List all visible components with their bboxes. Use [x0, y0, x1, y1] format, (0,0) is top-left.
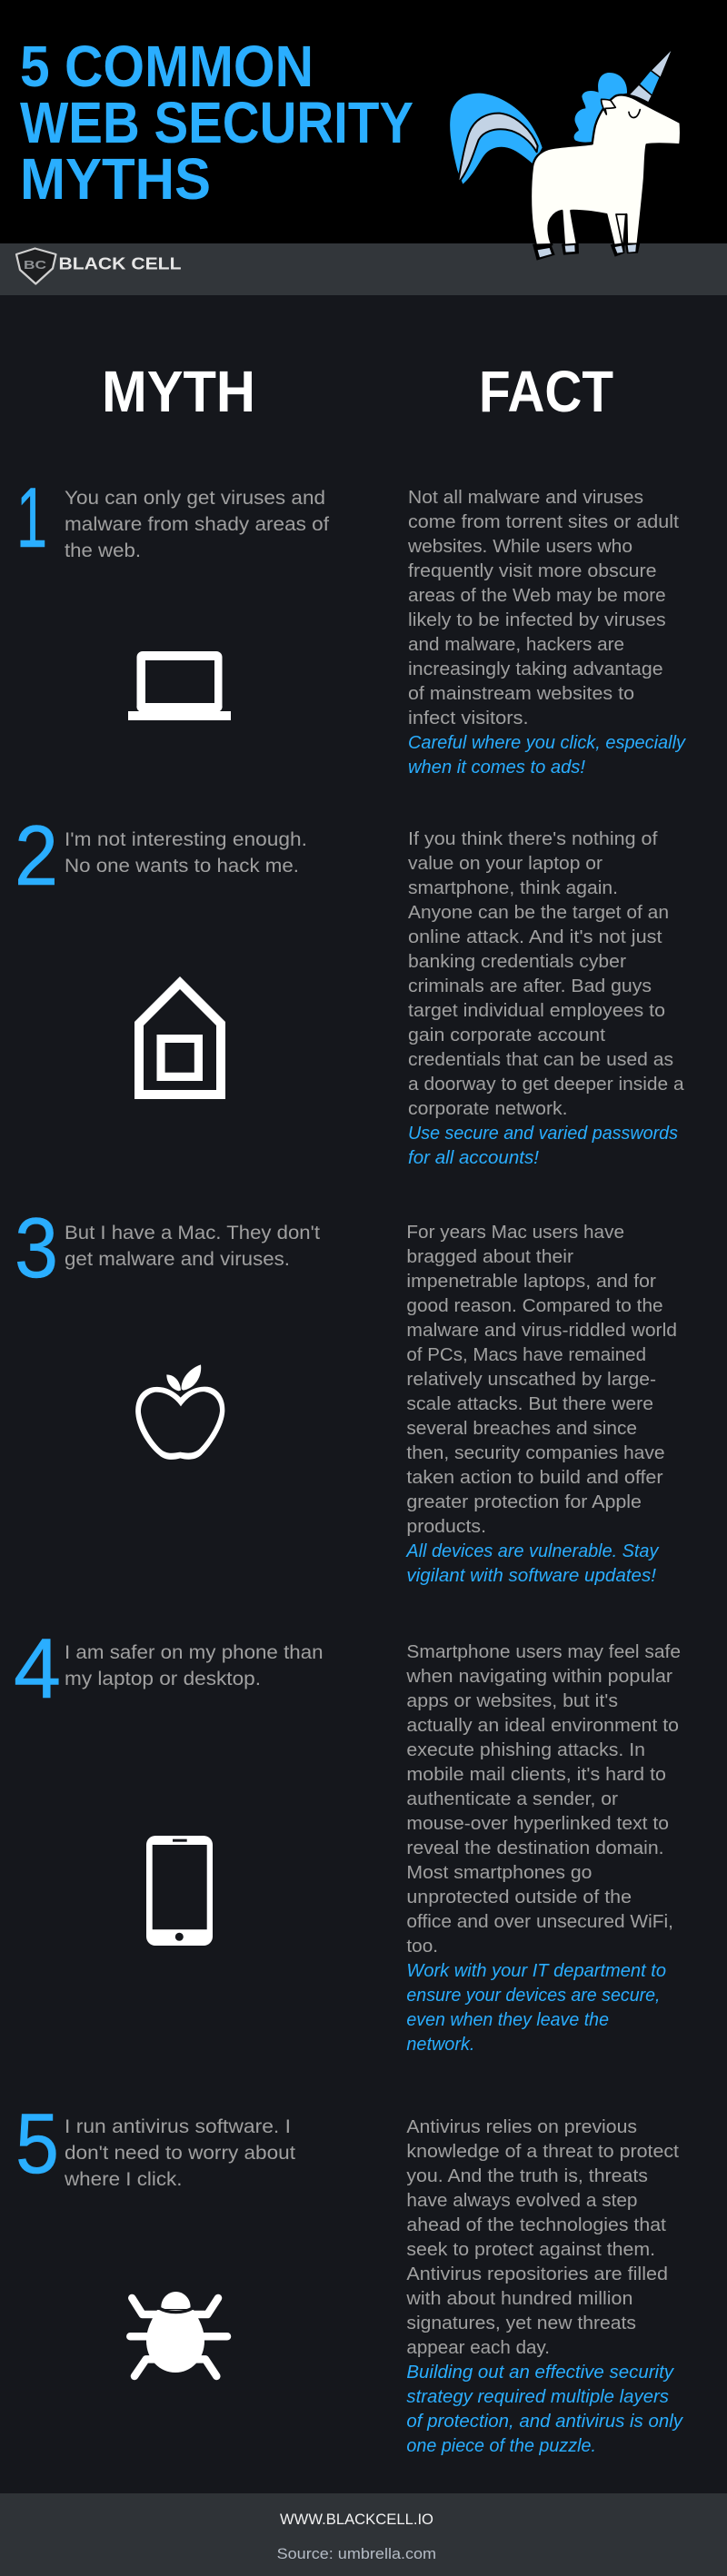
- fact text: a doorway to get deeper inside a: [408, 1075, 685, 1095]
- tip: strategy required multiple layers: [406, 2387, 669, 2407]
- fact text: seek to protect against them.: [406, 2240, 655, 2260]
- fact text: [405, 1642, 681, 1957]
- icon: smartphone: [146, 1836, 213, 1946]
- title: 5 COMMON: [20, 34, 314, 99]
- tip: of protection, and antivirus is only: [406, 2412, 683, 2432]
- fact text: areas of the Web may be more: [408, 586, 666, 606]
- fact text: authenticate a sender, or: [406, 1789, 618, 1809]
- number 3: 3: [15, 1200, 58, 1295]
- fact text: have always evolved a step: [406, 2191, 638, 2211]
- icon: laptop: [128, 651, 231, 720]
- fact text: signatures, yet new threats: [406, 2313, 636, 2333]
- fact text: Anyone can be the target of an: [408, 903, 669, 923]
- fact text: bragged about their: [406, 1247, 573, 1267]
- fact text: smartphone, think again.: [408, 878, 618, 898]
- fact text: frequently visit more obscure: [408, 561, 656, 581]
- fact text: you. And the truth is, threats: [406, 2166, 648, 2186]
- tip: [408, 1124, 678, 1168]
- fact text: mobile mail clients, it's hard to: [406, 1765, 666, 1785]
- fact text: unprotected outside of the: [406, 1887, 632, 1907]
- heading: fact: FACT: [479, 359, 613, 424]
- tip: vigilant with software updates!: [406, 1566, 656, 1586]
- myth text: [65, 1223, 320, 1270]
- myth text: [65, 1642, 324, 1689]
- icon: shield: [16, 249, 56, 283]
- fact text: several breaches and since: [406, 1419, 637, 1439]
- fact text: then, security companies have: [406, 1443, 665, 1463]
- icon: bug: [130, 2292, 227, 2376]
- fact text: actually an ideal environment to: [406, 1716, 679, 1736]
- fact text: [405, 2117, 679, 2358]
- myth text: my laptop or desktop.: [65, 1669, 261, 1689]
- number 4: 4: [14, 1620, 61, 1716]
- fact text: of mainstream websites to: [408, 684, 634, 704]
- fact text: Smartphone users may feel safe: [406, 1642, 681, 1662]
- myth text: the web.: [65, 540, 141, 561]
- myth text: where I click.: [64, 2169, 182, 2190]
- tip: Use secure and varied passwords: [408, 1124, 678, 1144]
- fact text: target individual employees to: [408, 1001, 665, 1021]
- tip: All devices are vulnerable. Stay: [405, 1541, 659, 1561]
- fact text: value on your laptop or: [408, 854, 603, 874]
- fact text: of PCs, Macs have remained: [406, 1345, 646, 1365]
- fact text: increasingly taking advantage: [408, 659, 663, 679]
- myth text: No one wants to hack me.: [65, 856, 299, 877]
- title: MYTHS: [20, 146, 211, 212]
- myth text: get malware and viruses.: [65, 1249, 290, 1270]
- fact text: credentials that can be used as: [408, 1050, 673, 1070]
- fact text: mouse-over hyperlinked text to: [406, 1814, 669, 1834]
- number 1: 1: [16, 470, 47, 565]
- panel: myth 4: [14, 1620, 681, 2055]
- myth text: malware from shady areas of: [65, 514, 329, 535]
- fact text: banking credentials cyber: [408, 952, 626, 972]
- fact text: For years Mac users have: [406, 1223, 624, 1243]
- fact text: too.: [406, 1937, 438, 1957]
- fact text: office and over unsecured WiFi,: [406, 1912, 673, 1932]
- icon: house: [134, 976, 225, 1099]
- number 2: 2: [15, 807, 58, 903]
- fact text: products.: [406, 1517, 486, 1537]
- fact text: and malware, hackers are: [408, 635, 624, 655]
- tip: [406, 2363, 683, 2456]
- fact text: [406, 1223, 677, 1537]
- myth text: [65, 488, 329, 561]
- fact text: come from torrent sites or adult: [408, 512, 679, 532]
- fact text: reveal the destination domain.: [406, 1838, 664, 1858]
- fact text: gain corporate account: [408, 1025, 605, 1045]
- heading: myth: MYTH: [102, 359, 255, 424]
- logo: Black Cell: [16, 249, 182, 283]
- title: [20, 34, 413, 212]
- myth text: [64, 2116, 295, 2190]
- tip: Building out an effective security: [406, 2363, 674, 2383]
- icon: apple: [135, 1364, 224, 1460]
- fact text: greater protection for Apple: [406, 1492, 642, 1512]
- tip: [405, 1541, 659, 1586]
- fact text: appear each day.: [406, 2338, 550, 2358]
- fact text: likely to be infected by viruses: [408, 610, 666, 630]
- website: WWW.BLACKCELL.IO: [280, 2511, 433, 2528]
- fact text: Not all malware and viruses: [408, 488, 643, 508]
- fact text: criminals are after. Bad guys: [408, 976, 652, 996]
- icon: shield: BC: [24, 258, 47, 272]
- source: Source: umbrella.com: [277, 2545, 436, 2562]
- fact text: relatively unscathed by large-: [406, 1370, 656, 1390]
- footer: [277, 2511, 436, 2562]
- fact text: corporate network.: [408, 1099, 567, 1119]
- title: WEB SECURITY: [20, 90, 413, 155]
- fact text: infect visitors.: [408, 708, 529, 728]
- tip: Work with your IT department to: [406, 1961, 666, 1981]
- panel: myth 1: [16, 470, 686, 778]
- number 5: 5: [15, 2095, 59, 2191]
- tip: when it comes to ads!: [408, 758, 585, 778]
- fact text: websites. While users who: [407, 537, 632, 557]
- fact text: scale attacks. But there were: [406, 1394, 653, 1414]
- fact text: knowledge of a threat to protect: [406, 2142, 679, 2162]
- fact text: with about hundred million: [405, 2289, 632, 2309]
- myth text: I am safer on my phone than: [65, 1642, 324, 1663]
- wordmark: BLACK CELL: [58, 254, 182, 272]
- myth text: I'm not interesting enough.: [65, 829, 307, 850]
- tip: [406, 1961, 666, 2055]
- fact text: execute phishing attacks. In: [406, 1740, 645, 1760]
- fact text: apps or websites, but it's: [406, 1691, 618, 1711]
- fact text: online attack. And it's not just: [408, 927, 662, 947]
- panel: myth 5: [15, 2095, 683, 2456]
- myth text: But I have a Mac. They don't: [65, 1223, 320, 1243]
- myth text: don't need to worry about: [65, 2143, 295, 2164]
- fact text: Most smartphones go: [406, 1863, 593, 1883]
- tip: network.: [406, 2035, 474, 2055]
- tip: for all accounts!: [408, 1148, 539, 1168]
- fact text: Antivirus repositories are filled: [406, 2264, 668, 2284]
- myth text: [65, 829, 307, 877]
- fact text: [408, 829, 685, 1119]
- fact text: good reason. Compared to the: [406, 1296, 663, 1316]
- fact text: when navigating within popular: [405, 1667, 672, 1687]
- tip: Careful where you click, especially: [408, 733, 686, 753]
- myth text: You can only get viruses and: [65, 488, 325, 509]
- tip: ensure your devices are secure,: [406, 1986, 660, 2006]
- myth text: I run antivirus software. I: [65, 2116, 291, 2137]
- tip: even when they leave the: [406, 2010, 609, 2030]
- icon: unicorn: [450, 51, 681, 261]
- fact text: taken action to build and offer: [406, 1468, 663, 1488]
- tip: [408, 733, 686, 778]
- fact text: malware and virus-riddled world: [406, 1321, 677, 1341]
- fact text: ahead of the technologies that: [406, 2215, 666, 2235]
- panel: myth 2: [15, 807, 685, 1168]
- fact text: Antivirus relies on previous: [406, 2117, 637, 2137]
- panel: myth 3: [15, 1200, 677, 1586]
- fact text: [407, 488, 679, 728]
- fact text: impenetrable laptops, and for: [406, 1272, 656, 1292]
- tip: one piece of the puzzle.: [406, 2436, 596, 2456]
- fact text: If you think there's nothing of: [408, 829, 658, 849]
